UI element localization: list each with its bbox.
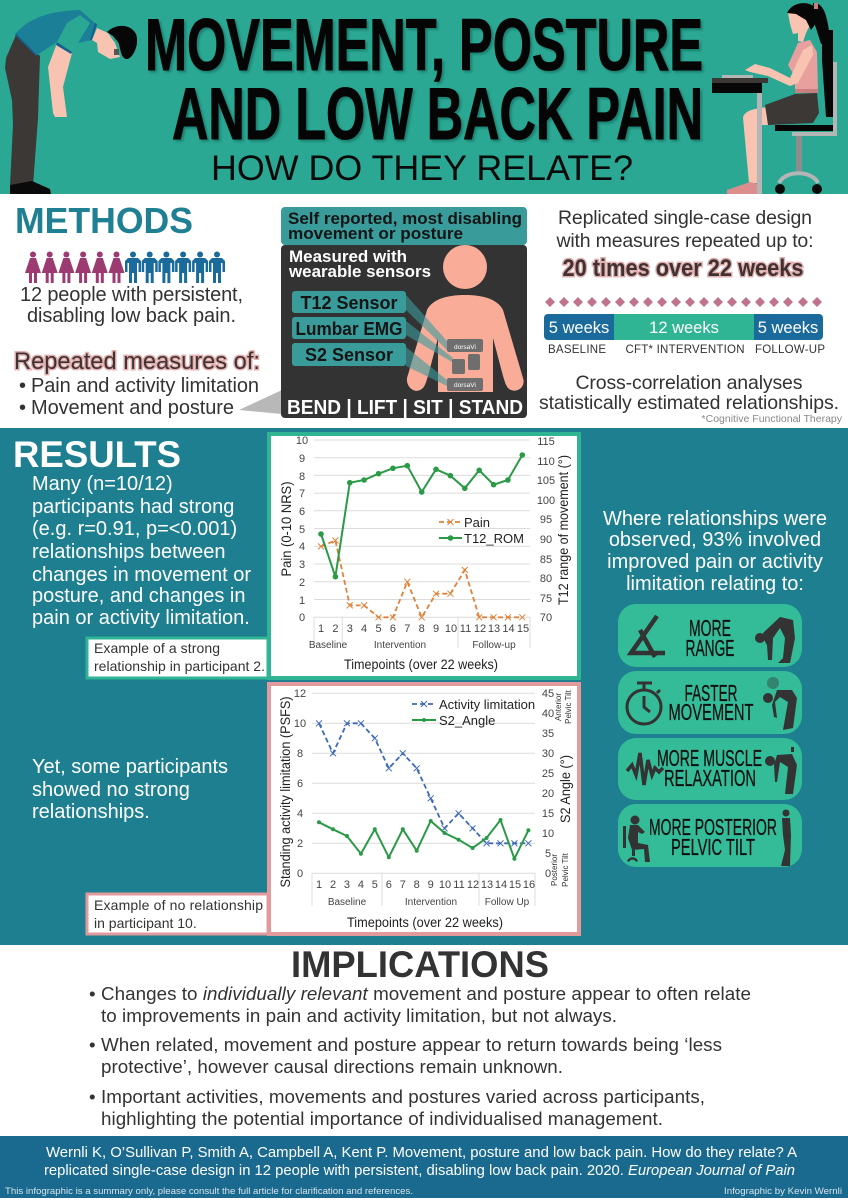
chart: pain and T12 range of movement: 8: [299, 471, 305, 483]
text: strong relationships: pain or activity limitation.: [32, 607, 250, 629]
text: strong relationships: relationships between: [32, 541, 225, 563]
chart: activity limitation and S2 angle: 6: [386, 879, 392, 891]
chart: activity limitation and S2 angle: 4: [358, 879, 364, 891]
text: citation: Wernli K, O’Sullivan P, Smith A, Campbell A, Kent P. Movement, posture and low back pain. How do they relate? A: [46, 1144, 797, 1161]
chart: pain and T12 range of movement: 110: [537, 456, 555, 468]
chart: activity limitation and S2 angle: Anterior: [554, 693, 563, 721]
chart: activity limitation and S2 angle: 12: [467, 879, 479, 891]
text: strong relationships: [32, 473, 251, 629]
chart: pain and T12 range of movement: 6: [390, 623, 396, 635]
chart: 20 measurement diamonds: [545, 297, 822, 307]
chart: pain and T12 range of movement: 4: [299, 541, 305, 553]
icon: body with sensors: dorsaVi: [454, 344, 476, 351]
chart: activity limitation and S2 angle: 6: [297, 778, 303, 790]
label: lumbar EMG: Lumbar EMG: [296, 319, 402, 339]
text: where relationships were observed: Where relationships were: [603, 508, 827, 530]
chart: activity limitation and S2 angle: 12: [294, 688, 306, 700]
callout: example of no relationship: in participant 10.: [94, 915, 197, 931]
panel: methods: [14, 200, 843, 425]
chart: activity limitation and S2 angle: 2: [330, 879, 336, 891]
panel: more muscle relaxation: MORE MUSCLE: [657, 745, 762, 771]
list: repeated measures: •: [19, 397, 26, 419]
chart: study timeline: FOLLOW-UP: [755, 344, 825, 356]
chart: activity limitation and S2 angle: Pelvic Tilt: [561, 852, 570, 887]
label: S2 sensor: S2 Sensor: [305, 345, 393, 365]
chart: activity limitation and S2 angle: 0: [297, 868, 303, 880]
text: strong relationships: Many (n=10/12): [32, 473, 173, 495]
chart: pain and T12 range of movement: 7: [299, 488, 305, 500]
chart: pain and T12 range of movement: 10: [445, 623, 457, 635]
icon: body with sensors: dorsaVi: [454, 382, 476, 389]
chart: pain and T12 range of movement: 7: [404, 623, 410, 635]
callout: example of no relationship: Example of no relationship: [94, 897, 263, 913]
legend: chart 2: S2_Angle: [439, 713, 495, 728]
chart: activity limitation and S2 angle: 14: [495, 879, 507, 891]
icon: stopwatch: [627, 683, 661, 724]
text: no relationships: [32, 756, 228, 823]
text: implication 2: protective’, however causal directions remain unknown.: [101, 1056, 563, 1077]
text: study design: [556, 207, 814, 252]
text: measured with sensors: wearable sensors: [288, 262, 431, 281]
chart: pain and T12 range of movement: 0: [299, 612, 305, 624]
icon: EMG wave: [627, 753, 663, 785]
text: analysis: [539, 372, 839, 414]
text: implication 3: •: [89, 1086, 96, 1107]
legend: chart 1: Pain: [464, 515, 490, 530]
chart: activity limitation and S2 angle: 4: [297, 808, 303, 820]
list: repeated measures: Movement and posture: [31, 397, 234, 419]
credit: Infographic by Kevin Wernli: [724, 1186, 842, 1197]
icon: standing person: [781, 810, 791, 866]
chart: pain and T12 range of movement: Follow-up: [472, 640, 516, 651]
icon: 12 people: [25, 252, 225, 283]
chart: pain and T12 range of movement: 70: [540, 612, 552, 624]
callout: example of strong relationship: [87, 638, 268, 678]
list: repeated measures: [19, 375, 259, 419]
chart: pain and T12 range of movement: 12: [474, 623, 486, 635]
chart: pain and T12 range of movement: 2: [299, 577, 305, 589]
label: S2 sensor: [292, 343, 406, 366]
panel: faster movement: MOVEMENT: [668, 699, 754, 725]
chart: activity limitation and S2 angle: 25: [542, 768, 554, 780]
panel: more range: [618, 604, 802, 667]
chart: pain and T12 range of movement: Intervention: [374, 640, 426, 651]
chart: activity limitation and S2 angle: Pelvic Tilt: [564, 689, 573, 724]
chart: pain and T12 range of movement: 15: [517, 623, 529, 635]
chart: pain and T12 range of movement: 3: [299, 559, 305, 571]
chart: pain and T12 range of movement: [269, 434, 579, 678]
chart: pain and T12 range of movement: 5: [375, 623, 382, 635]
text: citation: [44, 1144, 797, 1179]
icon: protractor angle: [631, 616, 665, 657]
panel: more range: RANGE: [686, 635, 734, 661]
chart: pain and T12 range of movement: Pain (0-10 NRS): [278, 482, 294, 576]
subtitle: HOW DO THEY RELATE?: [211, 149, 633, 188]
disclaimer: This infographic is a summary only, please consult the full article for clarification and references.: [5, 1186, 413, 1197]
chart: pain and T12 range of movement: 9: [433, 623, 439, 635]
chart: activity limitation and S2 angle: 10: [439, 879, 451, 891]
legend: chart 1: [439, 515, 524, 546]
text: analysis: Cross-correlation analyses: [576, 372, 803, 394]
chart: pain and T12 range of movement: 100: [537, 495, 555, 507]
chart: activity limitation and S2 angle: 1: [316, 879, 322, 891]
heading: results: RESULTS: [13, 434, 181, 475]
text: implication 2: When related, movement and posture appear to return towards being ‘less: [101, 1034, 722, 1055]
callout: 20 times over 22 weeks: 20 times over 22 weeks: [562, 255, 804, 282]
heading: repeated measures: Repeated measures of:: [14, 348, 260, 375]
text: study design: Replicated single-case design: [558, 207, 812, 229]
chart: activity limitation and S2 angle: 13: [481, 879, 493, 891]
text: where relationships were observed: improved pain or activity: [607, 551, 823, 573]
text: strong relationships: posture, and changes in: [32, 585, 246, 607]
chart: activity limitation and S2 angle: 5: [545, 848, 551, 860]
chart: study timeline: 12 weeks: [649, 319, 719, 337]
icon: bending person: [755, 617, 795, 663]
text: strong relationships: changes in movement or: [32, 564, 251, 586]
arrow: pointer to sensors: [239, 390, 282, 414]
chart: activity limitation and S2 angle: 16: [523, 879, 535, 891]
text: strong relationships: participants had strong: [32, 496, 234, 518]
panel: results: [0, 428, 848, 945]
panel: more range: MORE: [689, 615, 731, 641]
text: participants: [20, 284, 243, 327]
text: implication 1: •: [89, 983, 96, 1004]
legend: chart 2: Activity limitation: [439, 697, 535, 712]
callout: example of no relationship: [87, 894, 268, 934]
text: where relationships were observed: observed, 93% involved: [609, 529, 821, 551]
chart: pain and T12 range of movement: 5: [299, 524, 305, 536]
text: participants: 12 people with persistent,: [20, 284, 243, 306]
panel: more muscle relaxation: RELAXATION: [664, 765, 756, 791]
callout: example of strong relationship: Example of a strong: [94, 640, 220, 656]
chart: pain and T12 range of movement: 90: [540, 534, 552, 546]
text: implication 3: highlighting the potential importance of individualised management.: [101, 1108, 663, 1129]
legend: chart 1: T12_ROM: [464, 531, 524, 546]
icon: man bending forward: [5, 10, 137, 194]
text: implication 1: Changes to individually relevant movement and posture appear to often relate: [101, 983, 751, 1004]
chart: activity limitation and S2 angle: 15: [542, 808, 554, 820]
chart: activity limitation and S2 angle: Follow Up: [485, 897, 530, 908]
text: where relationships were observed: limitation relating to:: [626, 573, 804, 595]
chart: pain and T12 range of movement: 11: [460, 623, 471, 635]
panel: implications: [89, 944, 751, 1129]
panel: wearable sensors: [281, 207, 527, 419]
text: implication 1: [89, 983, 751, 1026]
chart: pain and T12 range of movement: 2: [332, 623, 338, 635]
text: activities: BEND | LIFT | SIT | STAND: [287, 397, 523, 419]
panel: faster movement: [618, 671, 802, 734]
chart: activity limitation and S2 angle: 8: [297, 748, 303, 760]
icon: bending person in motion: [763, 677, 797, 730]
chart: study timeline: [544, 314, 825, 356]
chart: pain and T12 range of movement: Baseline: [309, 640, 348, 651]
chart: activity limitation and S2 angle: 5: [372, 879, 378, 891]
icon: body with sensors: [406, 245, 524, 392]
chart: pain and T12 range of movement: 85: [540, 554, 552, 566]
icon: bending person relaxed: [765, 747, 797, 794]
chart: activity limitation and S2 angle: Timepoints (over 22 weeks): [347, 914, 503, 930]
text: no relationships: showed no strong: [32, 779, 190, 801]
chart: activity limitation and S2 angle: 9: [428, 879, 434, 891]
chart: pain and T12 range of movement: Timepoints (over 22 weeks): [344, 656, 498, 672]
text: no relationships: relationships.: [32, 801, 150, 823]
panel: header: [0, 0, 848, 194]
chart: pain and T12 range of movement: 10: [296, 435, 308, 447]
chart: activity limitation and S2 angle: 8: [414, 879, 420, 891]
chart: activity limitation and S2 angle: 30: [542, 748, 554, 760]
chart: pain and T12 range of movement: 75: [540, 593, 552, 605]
chart: activity limitation and S2 angle: 15: [509, 879, 521, 891]
chart: pain and T12 range of movement: 105: [537, 475, 555, 487]
text: measured with sensors: [288, 247, 431, 281]
text: implication 3: [89, 1086, 705, 1129]
callout: example of strong relationship: relationship in participant 2.: [94, 658, 265, 674]
chart: pain and T12 range of movement: 6: [299, 506, 305, 518]
chart: activity limitation and S2 angle: Posterior: [550, 854, 559, 886]
chart: activity limitation and S2 angle: 2: [297, 838, 303, 850]
chart: activity limitation and S2 angle: 0: [545, 868, 551, 880]
chart: pain and T12 range of movement: T12 range of movement (°): [555, 455, 571, 605]
text: analysis: statistically estimated relationships.: [539, 392, 839, 414]
text: implication 3: Important activities, movements and postures varied across participants,: [101, 1086, 705, 1107]
data line: activity limitation: [316, 720, 531, 846]
chart: pain and T12 range of movement: 95: [540, 514, 552, 526]
chart: activity limitation and S2 angle: Baseline: [328, 897, 367, 908]
chart: pain and T12 range of movement: 13: [488, 623, 500, 635]
text: strong relationships: (e.g. r=0.91, p=<0.001): [32, 518, 237, 540]
chart: activity limitation and S2 angle: 35: [542, 728, 554, 740]
chart: study timeline: CFT* INTERVENTION: [626, 344, 744, 356]
chart: pain and T12 range of movement: 14: [502, 623, 515, 635]
chart: activity limitation and S2 angle: S2 Angle (°): [557, 755, 573, 823]
data line: S2 angle: [317, 818, 530, 861]
icon: woman sitting at desk: [712, 3, 837, 194]
list: repeated measures: •: [19, 375, 26, 397]
legend: chart 2: [412, 697, 535, 728]
chart: pain and T12 range of movement: 115: [537, 436, 555, 448]
chart: pain and T12 range of movement: 3: [347, 623, 353, 635]
text: implication 2: •: [89, 1034, 96, 1055]
text: no relationships: Yet, some participants: [32, 756, 228, 778]
icon: seated person: [623, 816, 650, 862]
text: implication 2: [89, 1034, 722, 1077]
chart: study timeline: 5 weeks: [758, 319, 818, 337]
panel: footer: [0, 1136, 848, 1198]
chart: pain and T12 range of movement: 4: [361, 623, 367, 635]
chart: activity limitation and S2 angle: 7: [400, 879, 406, 891]
chart: activity limitation and S2 angle: 11: [453, 879, 465, 891]
heading: methods: METHODS: [15, 200, 193, 241]
text: where relationships were observed: [603, 508, 827, 595]
chart: activity limitation and S2 angle: Intervention: [405, 897, 457, 908]
data line: T12 range of movement: [318, 452, 525, 580]
text: citation: replicated single-case design in 12 people with persistent, disabling low back pain. 2020. European Journal of Pain: [44, 1162, 795, 1179]
chart: activity limitation and S2 angle: 20: [542, 788, 554, 800]
chart: activity limitation and S2 angle: 10: [294, 718, 306, 730]
panel: more posterior pelvic tilt: PELVIC TILT: [671, 834, 755, 860]
heading: implications: IMPLICATIONS: [291, 944, 549, 985]
text: study design: with measures repeated up to:: [556, 230, 814, 252]
footnote: *Cognitive Functional Therapy: [702, 413, 843, 425]
text: participants: disabling low back pain.: [27, 305, 236, 327]
label: T12 sensor: T12 Sensor: [300, 293, 398, 313]
data line: pain: [318, 538, 525, 620]
chart: pain and T12 range of movement: 1: [318, 623, 324, 635]
chart: study timeline: 5 weeks: [549, 319, 609, 337]
chart: pain and T12 range of movement: 9: [299, 453, 305, 465]
panel: more muscle relaxation: [618, 738, 802, 800]
panel: faster movement: FASTER: [684, 680, 738, 706]
chart: study timeline: BASELINE: [548, 344, 606, 356]
list: repeated measures: Pain and activity limitation: [31, 375, 259, 397]
text: measured with sensors: Measured with: [289, 247, 407, 266]
chart: pain and T12 range of movement: 80: [540, 573, 552, 585]
heading: self reported: movement or posture: [288, 224, 463, 243]
title: [145, 5, 703, 155]
heading: self reported: [281, 207, 527, 245]
chart: activity limitation and S2 angle: Standing activity limitation (PSFS): [277, 696, 293, 888]
heading: self reported: Self reported, most disabling: [288, 209, 522, 228]
chart: activity limitation and S2 angle: 45: [542, 688, 554, 700]
chart: activity limitation and S2 angle: [269, 684, 579, 934]
chart: activity limitation and S2 angle: 40: [542, 708, 554, 720]
chart: activity limitation and S2 angle: 10: [542, 828, 554, 840]
text: implication 1: to improvements in pain and activity limitation, but not always.: [101, 1005, 617, 1026]
chart: activity limitation and S2 angle: 3: [344, 879, 350, 891]
chart: pain and T12 range of movement: 1: [299, 595, 305, 607]
chart: pain and T12 range of movement: 8: [419, 623, 425, 635]
panel: more posterior pelvic tilt: [618, 804, 802, 867]
